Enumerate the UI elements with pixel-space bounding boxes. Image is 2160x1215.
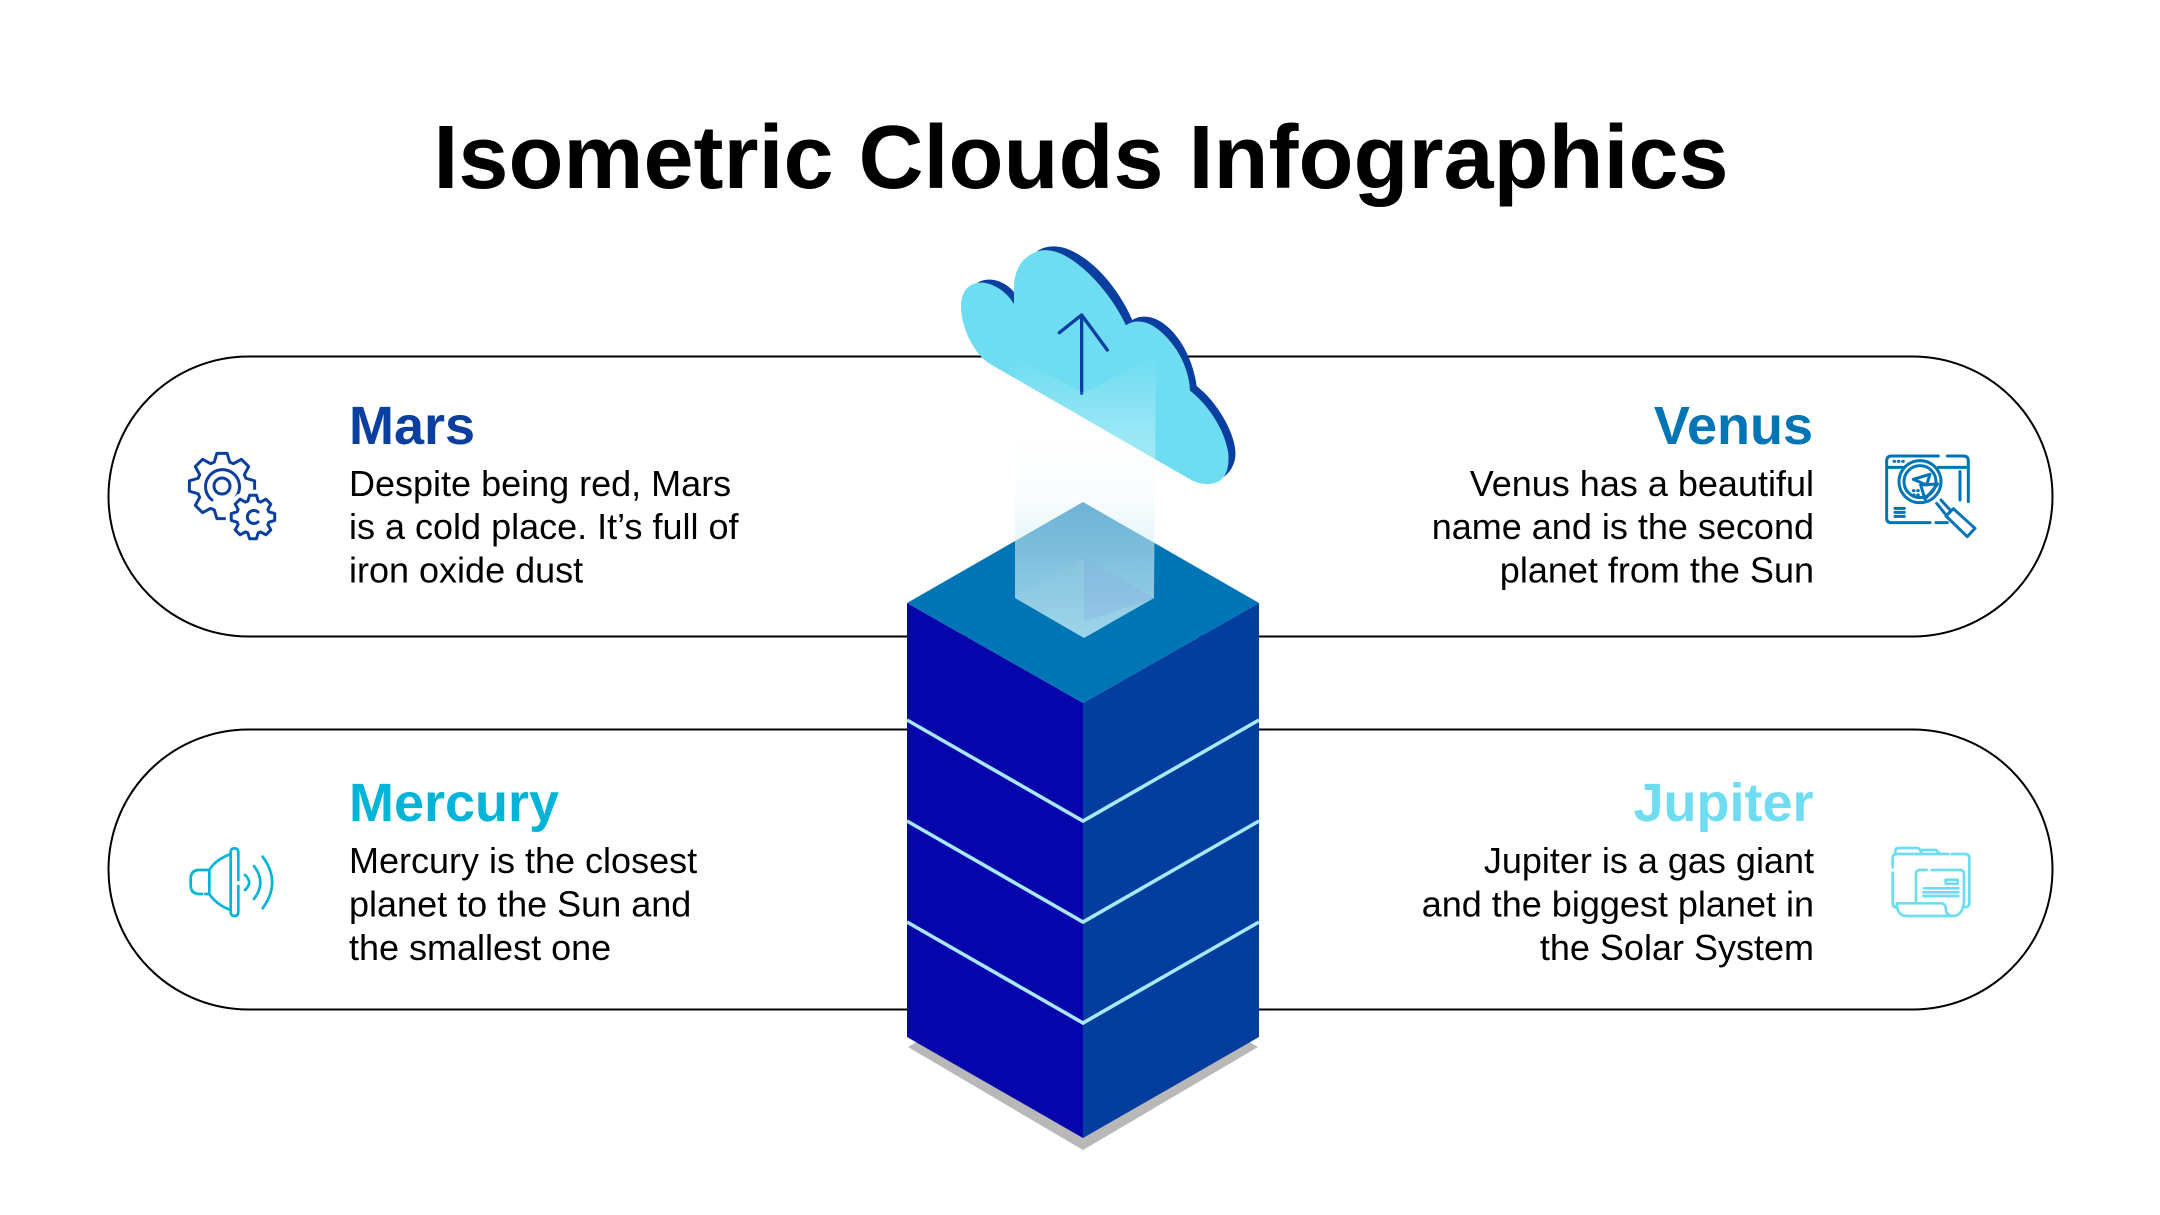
text block: Jupiter: and the biggest planet in	[1422, 884, 1814, 924]
text block: Mercury	[349, 773, 697, 968]
text block: Jupiter: the Solar System	[1540, 927, 1814, 968]
icon: browser magnifier	[1887, 456, 1975, 537]
icon: speaker	[191, 848, 272, 916]
icon: folder	[1893, 848, 1969, 916]
text block: Mars: is a cold place. It’s full of	[349, 506, 740, 547]
text block: Venus: name and is the second	[1432, 506, 1814, 547]
text block: Venus	[1432, 396, 1814, 590]
translucent light beam	[1015, 356, 1156, 638]
cloud front	[961, 250, 1229, 484]
text block: Mercury: planet to the Sun and	[349, 884, 691, 924]
text block: Jupiter: Jupiter	[1633, 773, 1814, 833]
text block: Mars: Despite being red, Mars	[349, 463, 731, 504]
cloud	[961, 246, 1235, 484]
right face	[1083, 603, 1259, 1138]
text block: Jupiter	[1422, 773, 1814, 968]
beam base diamond	[1015, 558, 1154, 638]
panel: bottom rounded outline	[108, 730, 2052, 1010]
text block: Mars	[349, 396, 740, 590]
shadow under server	[908, 946, 1258, 1150]
server block	[907, 502, 1259, 1138]
text block: Mercury: Mercury	[349, 773, 559, 833]
text block: Venus: Venus	[1654, 396, 1813, 456]
left face	[907, 603, 1083, 1138]
text block: Venus: Venus has a beautiful	[1470, 463, 1814, 504]
icon: gears	[189, 453, 275, 539]
text block: Mars: Mars	[349, 396, 475, 456]
text block: Mercury: Mercury is the closest	[349, 840, 697, 881]
arrow	[1059, 315, 1107, 393]
text block: Venus: planet from the Sun	[1500, 550, 1814, 590]
text block: Mercury: the smallest one	[349, 927, 611, 968]
title: Isometric Clouds Infographics	[433, 108, 1729, 208]
text block: Jupiter: Jupiter is a gas giant	[1484, 840, 1814, 881]
text block: Mars: iron oxide dust	[349, 550, 583, 590]
top face	[907, 502, 1259, 703]
cloud side	[977, 246, 1235, 478]
layer lines	[907, 720, 1259, 1023]
panel: top rounded outline	[108, 356, 2052, 636]
